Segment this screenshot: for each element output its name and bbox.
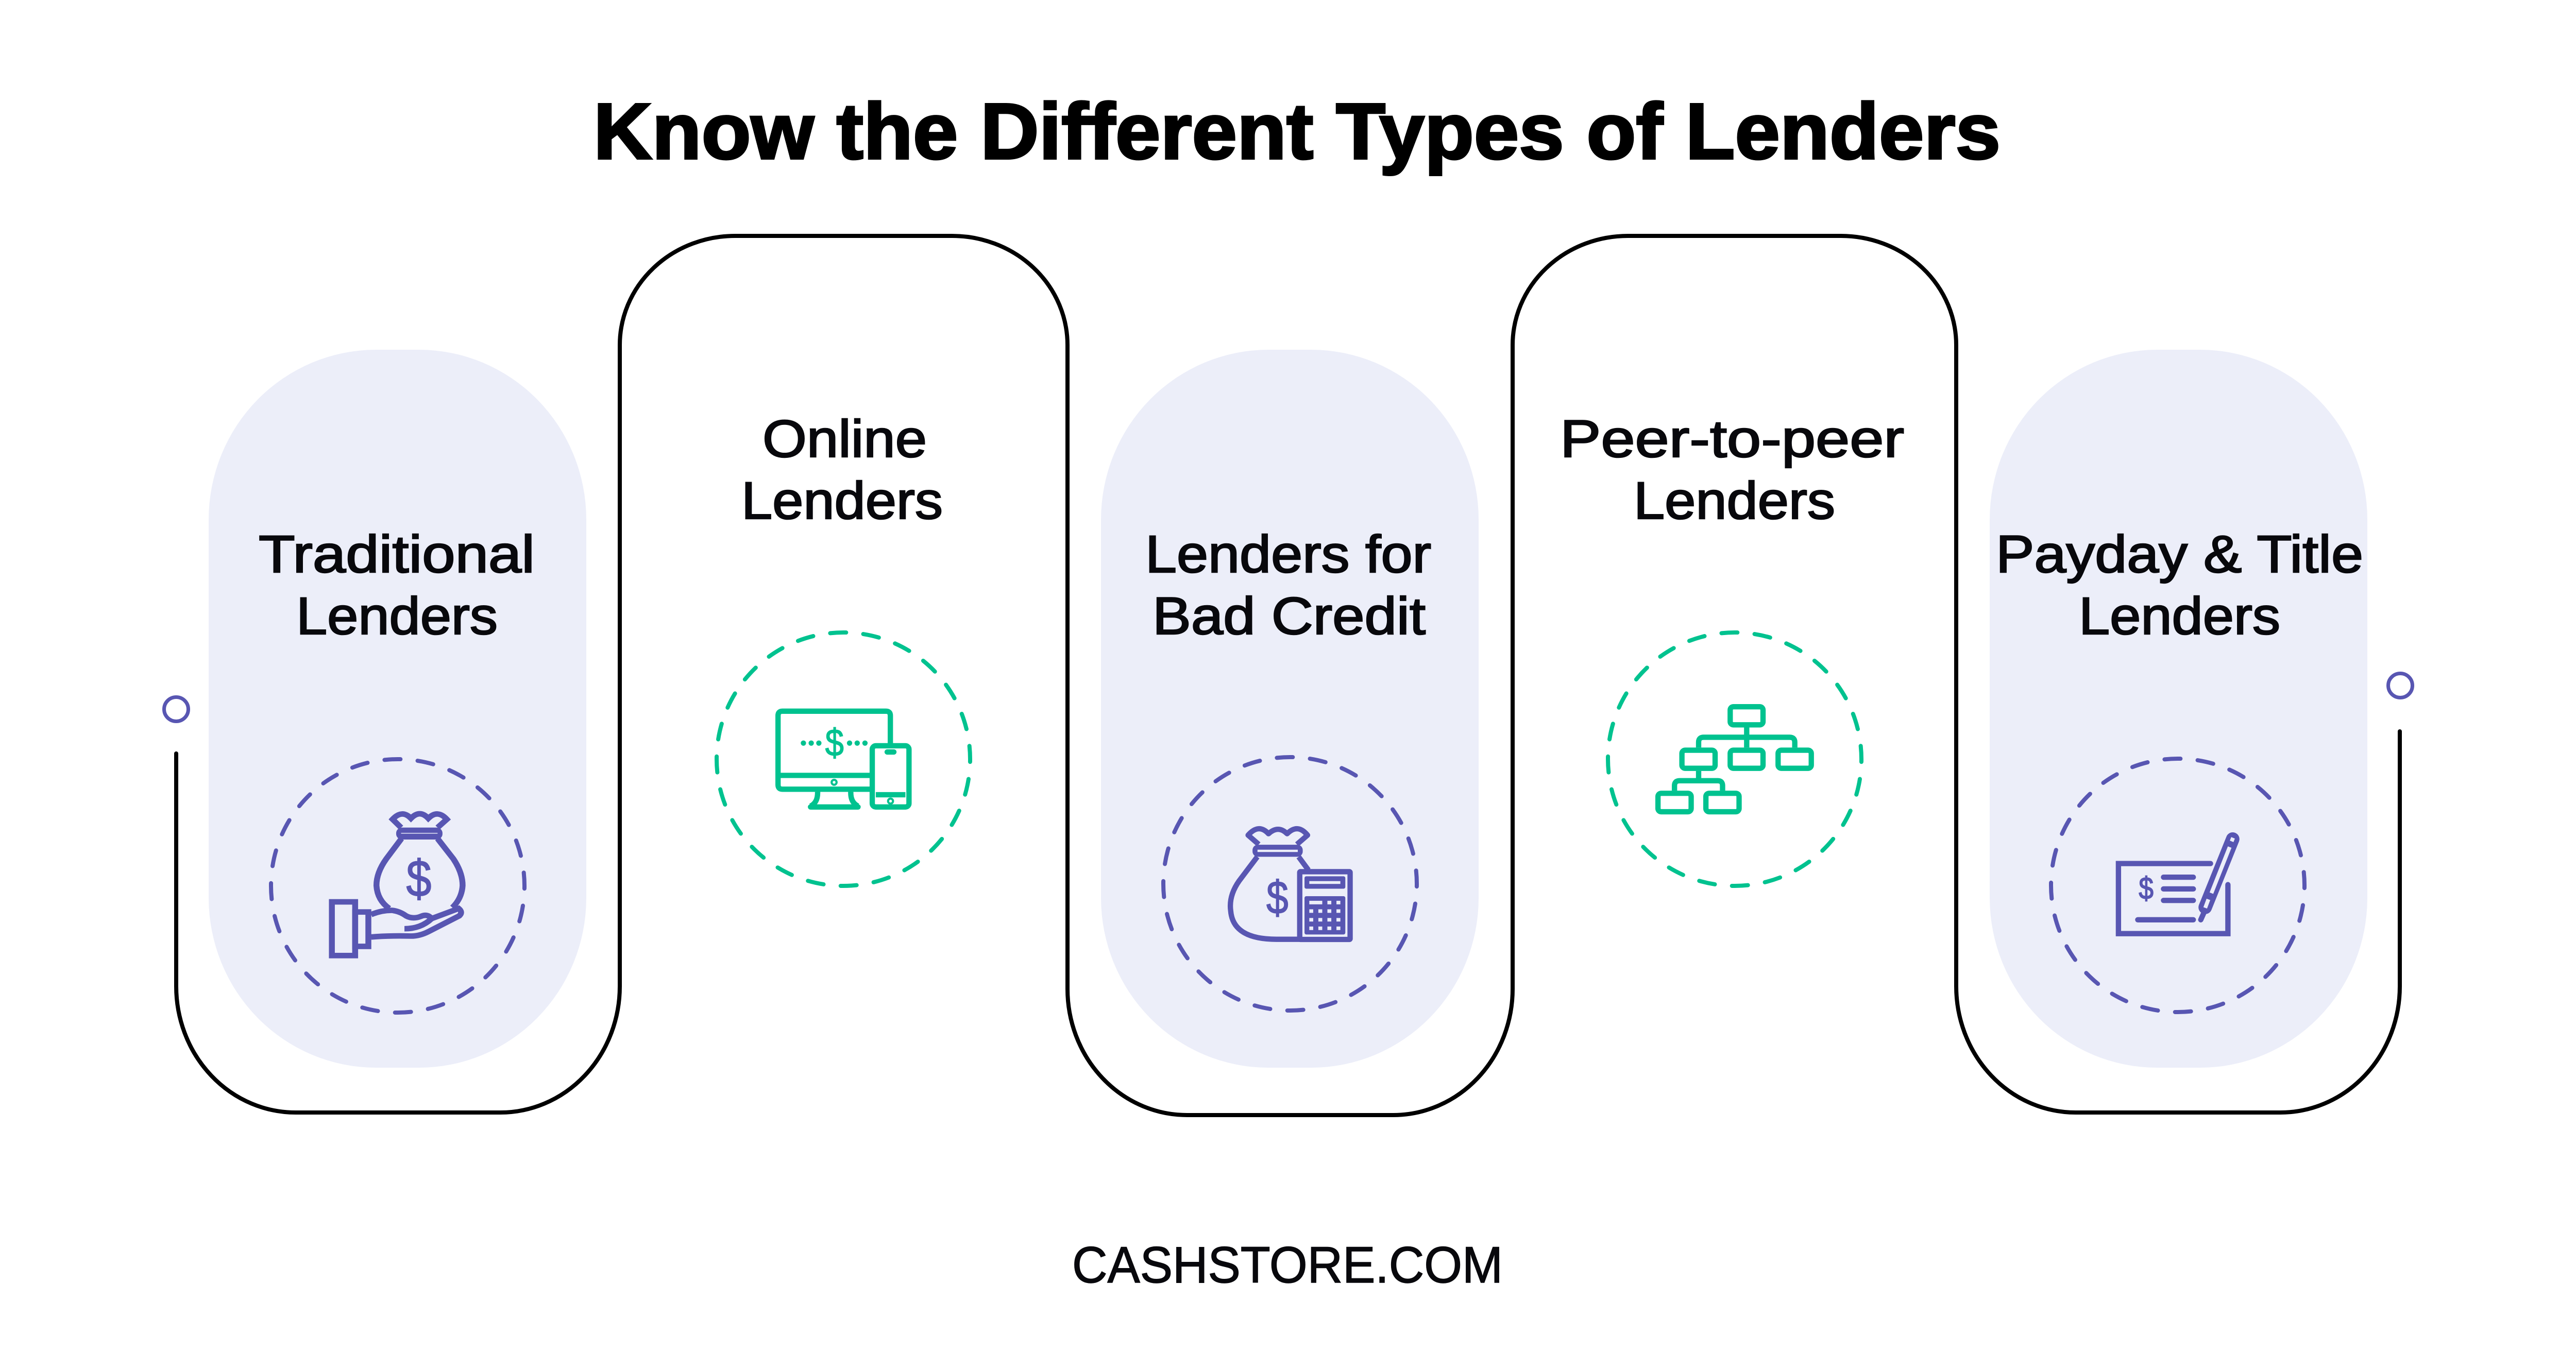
- label: Lenders: [741, 471, 943, 530]
- label: [741, 409, 943, 530]
- panel background: [1101, 350, 1479, 1068]
- icon: cheque and pen: [2119, 838, 2233, 934]
- title: Know the Different Types of Lenders: [594, 87, 2001, 176]
- icon: cheque and pen: $: [2139, 870, 2154, 905]
- panel: Traditional Lenders: [209, 350, 586, 1068]
- label: Lenders: [296, 587, 498, 645]
- label: [1560, 409, 1904, 530]
- icon: money bag and calculator: [1230, 829, 1350, 939]
- label: Lenders for: [1145, 525, 1431, 584]
- label: [1996, 525, 2363, 645]
- label: Online: [762, 409, 927, 468]
- icon: money bag and calculator: $: [1266, 871, 1289, 923]
- panel background: [209, 350, 586, 1068]
- icon: money bag on open hand: [332, 814, 463, 955]
- panel: Lenders for Bad Credit: [1101, 350, 1479, 1068]
- dashed icon ring: [259, 747, 537, 1025]
- panel: Online Lenders: [704, 409, 982, 898]
- label: Lenders: [2079, 587, 2280, 645]
- start marker circle: [164, 697, 189, 721]
- icon: money bag on open hand: $: [406, 850, 431, 907]
- label: Traditional: [259, 525, 535, 584]
- label: [1145, 525, 1431, 645]
- dashed icon ring: [704, 620, 982, 898]
- label: Payday & Title: [1996, 525, 2363, 584]
- dashed icon ring: [1151, 745, 1429, 1023]
- connector line: serpentine path: [176, 236, 2400, 1115]
- end marker circle: [2388, 674, 2412, 697]
- icon: monitor and phone with dollar: [778, 711, 909, 807]
- label: [259, 525, 535, 645]
- panel background: [1990, 350, 2367, 1068]
- label: Peer-to-peer: [1560, 409, 1904, 468]
- icon: monitor and phone with dollar: $: [825, 721, 844, 764]
- dashed icon ring: [1596, 620, 1874, 898]
- panel: Payday & Title Lenders: [1990, 350, 2367, 1068]
- dashed icon ring: [2039, 746, 2317, 1024]
- panel: Peer-to-peer Lenders: [1560, 409, 1904, 898]
- label: Lenders: [1634, 471, 1835, 530]
- icon: network hierarchy: [1658, 707, 1811, 812]
- label: Bad Credit: [1153, 587, 1426, 645]
- footer: site name: CASHSTORE.COM: [1072, 1236, 1503, 1293]
